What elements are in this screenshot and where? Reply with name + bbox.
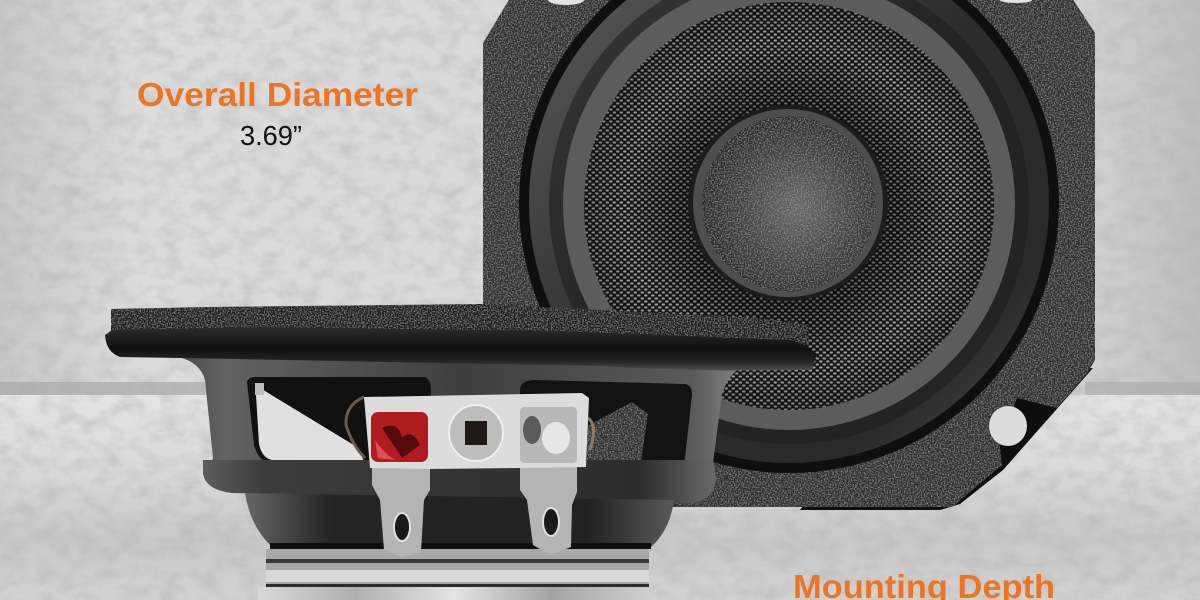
- red solder terminal: [371, 412, 428, 462]
- mounting holes: [548, 0, 1032, 446]
- black rear frame edge: [800, 368, 1093, 510]
- mesh cone: [584, 2, 994, 410]
- value: 3.69”: [240, 120, 302, 151]
- dust cap dome: [688, 105, 888, 301]
- side-view speaker: [105, 304, 816, 600]
- magnet plate: [266, 543, 651, 587]
- lower band: [203, 460, 716, 503]
- label: overall diameter: [137, 76, 418, 151]
- terminal wires: [346, 397, 594, 458]
- gasket top plate: [111, 304, 809, 345]
- magnet cylinder: [258, 587, 650, 600]
- centre rivet: [449, 405, 503, 461]
- terminal tabs: [372, 465, 577, 557]
- terminal board: [364, 393, 589, 469]
- front-view speaker: [483, 0, 1095, 510]
- heading: Overall Diameter: [137, 76, 418, 113]
- basket: [178, 357, 750, 470]
- motor body: [245, 493, 674, 547]
- right window: [520, 380, 692, 467]
- left window: [247, 377, 431, 462]
- mounting frame: [483, 0, 1095, 507]
- flange: [105, 327, 816, 370]
- surround: [519, 0, 1059, 473]
- silver solder terminal: [520, 407, 577, 463]
